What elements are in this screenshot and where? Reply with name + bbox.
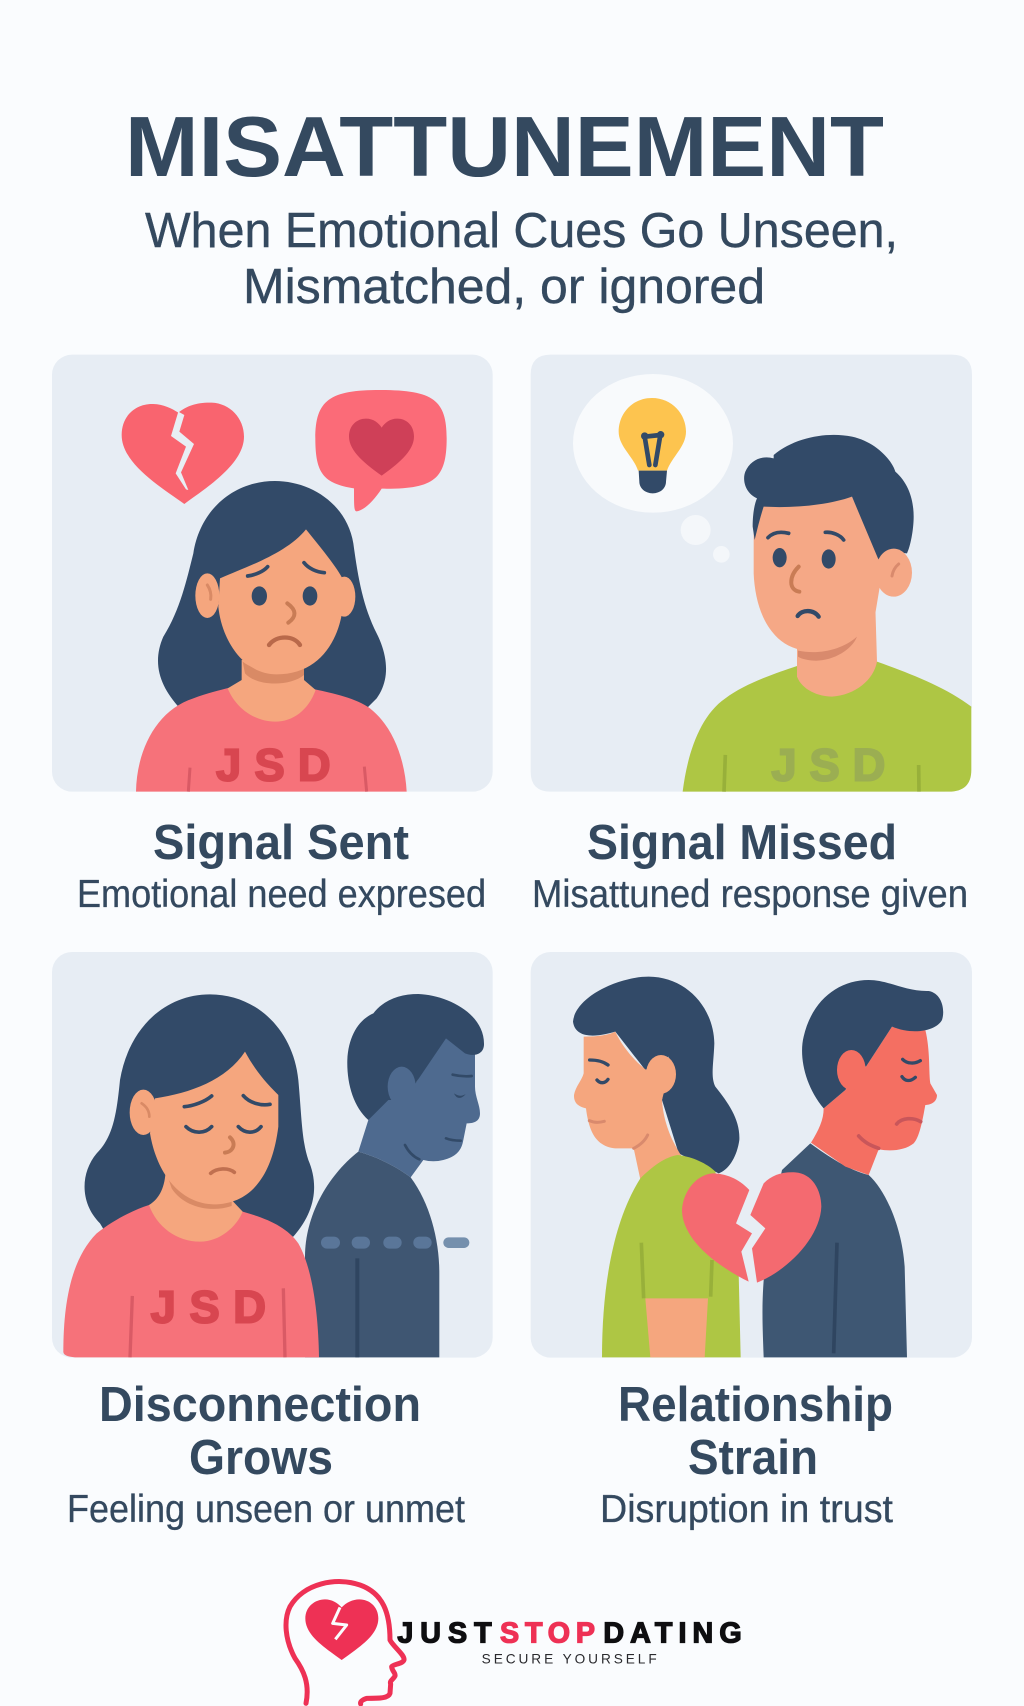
sad woman figure: [63, 994, 319, 1357]
woman in profile: [573, 977, 741, 1357]
panel: relationship strain caption: Disruption in trust: [600, 1488, 893, 1531]
dashed fading line: [321, 1237, 469, 1249]
wordmark: JUST: [397, 1617, 492, 1649]
icon: speech bubble with heart: [315, 390, 447, 511]
wordmark: STOP: [500, 1617, 595, 1649]
panel: signal missed caption: Misattuned response given: [532, 873, 968, 916]
woman figure: [136, 481, 407, 792]
wordmark: DATING: [603, 1617, 742, 1649]
panel: relationship strain caption: [600, 1378, 893, 1531]
icon: light bulb: [619, 398, 686, 493]
panel: relationship strain caption: Relationship: [618, 1378, 893, 1432]
panel: disconnection grows caption: Disconnection: [99, 1378, 421, 1432]
panel: signal sent caption: Emotional need expresed: [77, 873, 486, 916]
panel: signal missed caption: [532, 816, 968, 916]
shirt logo: JSD: [771, 740, 885, 791]
fading man figure: [305, 994, 484, 1357]
panel: signal sent caption: Signal Sent: [153, 816, 409, 870]
icon: broken heart: [122, 403, 244, 504]
shirt logo: JSD: [216, 740, 331, 791]
wordmark: [397, 1617, 742, 1649]
title: MISATTUNEMENT: [125, 100, 884, 195]
tagline: SECURE YOURSELF: [482, 1651, 657, 1666]
panel: disconnection grows caption: [67, 1378, 465, 1531]
panel: signal missed illustration: [531, 355, 972, 792]
man in profile: [762, 980, 943, 1357]
subtitle: Mismatched, or ignored: [243, 260, 765, 314]
icon: split heart: [682, 1172, 821, 1283]
icon: thought bubble: [573, 374, 733, 563]
logo: Just Stop Dating: [286, 1582, 742, 1704]
panel: disconnection grows caption: Grows: [189, 1431, 333, 1485]
subtitle: [145, 204, 898, 314]
shirt logo: JSD: [151, 1281, 266, 1332]
panel: relationship strain caption: Strain: [688, 1431, 818, 1485]
panel: signal missed caption: Signal Missed: [587, 816, 897, 870]
panel: disconnection grows caption: Feeling unseen or unmet: [67, 1488, 465, 1531]
panel: signal sent caption: [77, 816, 486, 916]
man figure: [683, 435, 971, 792]
panel: relationship strain illustration: [531, 952, 972, 1358]
icon: head outline with broken heart: [286, 1582, 404, 1704]
panel: signal sent illustration: [52, 355, 493, 792]
panel: disconnection grows illustration: [52, 952, 493, 1358]
subtitle: When Emotional Cues Go Unseen,: [145, 204, 898, 258]
